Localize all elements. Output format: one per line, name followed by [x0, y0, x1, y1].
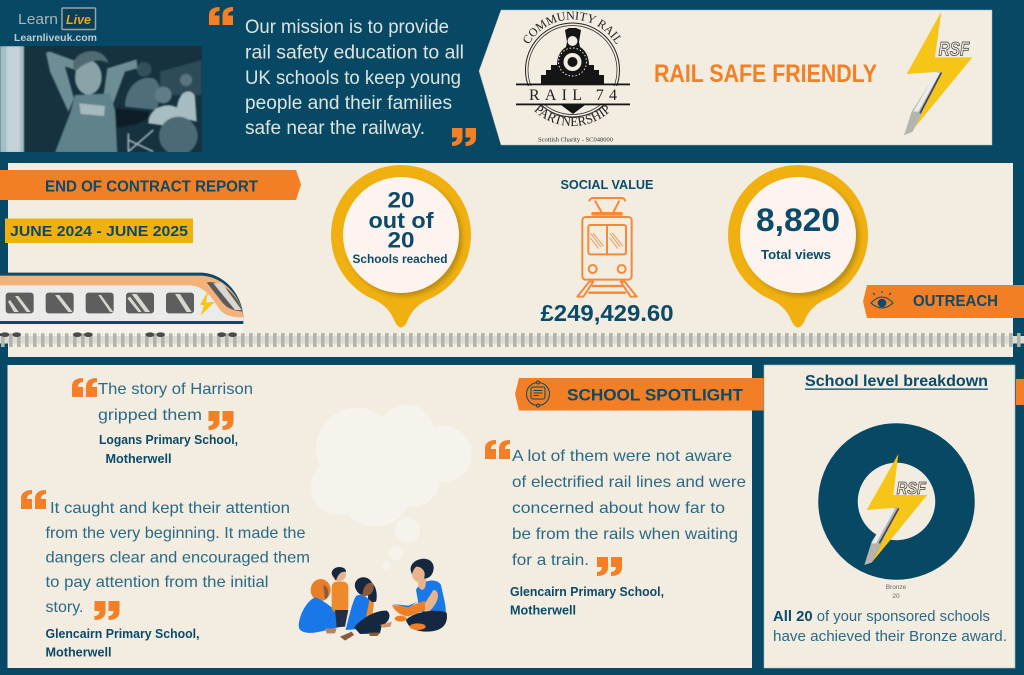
quote: Logans Primary School: The story of Harrison	[98, 381, 253, 398]
quote: Logans Primary School: gripped them	[98, 407, 202, 424]
quote: Glencairn Primary School right: Glencairn Primary School,	[510, 585, 664, 599]
text: bronze award summary	[773, 608, 1007, 645]
quote: Glencairn Primary School left: story.	[46, 599, 84, 616]
stat: social value: SOCIAL VALUE	[560, 178, 654, 192]
pin: schools reached: Schools reached	[352, 252, 448, 266]
logo: Community Rail Partnership Rail 74	[516, 12, 630, 144]
icon: RSF lightning bolt	[904, 12, 972, 135]
banner: outreach	[863, 285, 1024, 318]
quote: Logans Primary School	[72, 378, 253, 466]
illustration: train	[0, 273, 243, 337]
quote: Glencairn Primary School right: for a train.	[512, 552, 589, 569]
quote: Glencairn Primary School right: A lot of them were not aware	[512, 448, 732, 465]
label: date range	[5, 218, 193, 243]
icon: RSF lightning bolt: RSF	[939, 40, 970, 61]
quote: Glencairn Primary School left: Motherwell	[46, 646, 112, 660]
quote: Glencairn Primary School right: be from the rails when waiting	[512, 526, 738, 543]
track: railway line	[0, 333, 1024, 347]
banner: end of contract report	[0, 170, 301, 200]
banner: end of contract report: END OF CONTRACT REPORT	[45, 178, 258, 196]
illustration: thought cloud	[311, 404, 472, 570]
logo: Community Rail Partnership Rail 74: RAIL 74	[529, 87, 617, 104]
quote: Logans Primary School: Motherwell	[106, 452, 172, 466]
pin: schools reached: 20	[388, 228, 414, 252]
pin: total views: Total views	[761, 247, 831, 262]
heading: school level breakdown: School level breakdown	[805, 373, 988, 390]
quote: Glencairn Primary School right: concerned about how far to	[512, 500, 725, 517]
quote: Glencairn Primary School right: of electrified rail lines and were	[512, 474, 746, 491]
chart: donut bronze 20	[838, 443, 955, 600]
pin: schools reached: 20	[388, 188, 414, 212]
mission statement: rail safety education to all	[245, 42, 464, 64]
quote: Glencairn Primary School right: Motherwell	[510, 604, 576, 618]
stat: social value	[540, 178, 674, 326]
logo: Community Rail Partnership Rail 74: PARTNERSHIP	[534, 105, 609, 126]
panel: school spotlight quotes	[8, 365, 752, 668]
banner: school spotlight: SCHOOL SPOTLIGHT	[567, 386, 744, 404]
quote: Glencairn Primary School left: from the very beginning. It made the	[46, 525, 306, 542]
logo: Learn Live: Learnliveuk.com	[14, 32, 97, 44]
stat: social value: £249,429.60	[540, 300, 674, 326]
quote mark: mission close	[452, 128, 476, 146]
logo: Community Rail Partnership Rail 74: COMMUNITY RAIL	[524, 12, 621, 44]
panel: report overview	[0, 163, 1024, 357]
icon: RSF lightning bolt	[864, 454, 927, 565]
mission statement: UK schools to keep young	[245, 68, 461, 89]
decoration tab: right orange	[1016, 379, 1024, 405]
logo: Learn Live: Learn	[18, 12, 58, 28]
quote: Logans Primary School: Logans Primary School,	[99, 433, 238, 447]
logo: Community Rail Partnership Rail 74: Scottish Charity - SC048000	[538, 136, 613, 144]
chart: donut bronze 20: 20	[892, 593, 900, 600]
mission statement: Our mission is to provide	[245, 17, 449, 38]
logo: Learn Live: Live	[66, 12, 91, 27]
icon: eye	[871, 291, 893, 308]
label: date range: JUNE 2024 - JUNE 2025	[10, 223, 188, 240]
quote: Glencairn Primary School left: It caught and kept their attention	[50, 500, 290, 517]
pin: schools reached	[331, 165, 471, 328]
text: bronze award summary: have achieved their Bronze award.	[773, 628, 1007, 645]
heading: Rail Safe Friendly: RAIL SAFE FRIENDLY	[654, 60, 877, 88]
mission statement	[245, 17, 464, 139]
logo: Learn Live	[14, 8, 97, 44]
chart: donut bronze 20: Bronze	[886, 584, 907, 591]
pin: total views	[728, 165, 868, 328]
pin: total views: 8,820	[756, 202, 840, 238]
quote: Glencairn Primary School left: dangers clear and encouraged them	[46, 550, 310, 566]
icon: speech bubble	[526, 381, 550, 407]
panel: Rail Safe Friendly header	[478, 10, 992, 146]
panel: school level breakdown	[764, 365, 1015, 668]
banner: school spotlight	[515, 378, 764, 410]
illustration: teacher reading to children	[299, 559, 447, 641]
quote mark: mission open	[209, 7, 233, 25]
quote: Glencairn Primary School right	[485, 440, 746, 618]
quote: Glencairn Primary School left: to pay attention from the initial	[46, 574, 268, 591]
quote: Glencairn Primary School left: Glencairn Primary School,	[46, 627, 200, 641]
text: bronze award summary: All 20 of your sponsored schools	[773, 608, 990, 625]
banner: outreach: OUTREACH	[913, 293, 998, 310]
icon: RSF lightning bolt: RSF	[897, 478, 927, 498]
mission statement: safe near the railway.	[245, 118, 425, 139]
photo: boy with hands behind head	[0, 46, 202, 155]
quote: Glencairn Primary School left	[21, 490, 310, 660]
mission statement: people and their families	[245, 93, 452, 114]
pin: schools reached: out of	[368, 208, 434, 233]
icon: tram	[577, 198, 637, 297]
